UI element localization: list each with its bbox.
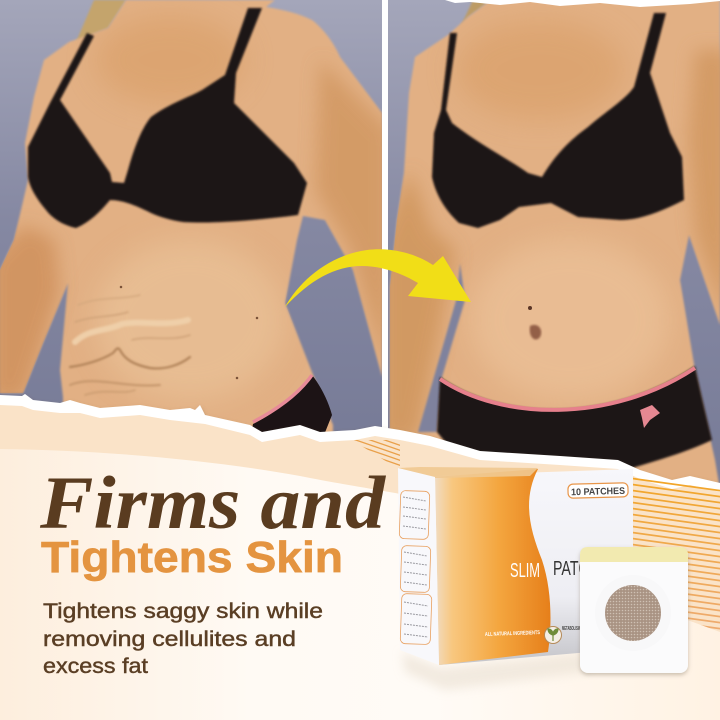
bra — [28, 8, 307, 228]
box reflection — [402, 652, 590, 690]
cream sweep — [0, 449, 720, 720]
adhesive tab — [580, 547, 688, 562]
belly tone — [95, 240, 285, 400]
orange stripes right — [633, 478, 720, 630]
box side face — [398, 468, 439, 665]
blonde hair — [462, 2, 486, 24]
briefs trim — [440, 368, 695, 410]
briefs trim — [253, 375, 312, 422]
description text — [43, 600, 323, 678]
yellow arrow — [285, 249, 471, 307]
box title slim: SLIM — [510, 560, 540, 582]
loose skin folds — [70, 295, 190, 395]
mole — [528, 306, 532, 310]
leaf seal — [544, 626, 562, 644]
product box — [398, 467, 633, 690]
peach layer — [0, 405, 720, 720]
blonde hair — [76, 0, 126, 42]
description text: Tightens saggy skin while — [43, 600, 323, 623]
left arm tone — [0, 225, 60, 400]
chest tone — [455, 20, 625, 120]
right arm tone — [688, 50, 720, 330]
brief logo — [640, 405, 660, 428]
side labels — [399, 490, 432, 645]
description text: excess fat — [43, 655, 148, 678]
subheadline: Tightens Skin — [41, 533, 343, 582]
briefs — [252, 375, 332, 432]
patch halo — [595, 575, 671, 651]
box white front — [435, 469, 633, 665]
patch base — [580, 547, 688, 673]
chest tone — [95, 15, 245, 105]
backdrop — [0, 0, 382, 440]
torso and arms — [0, 0, 382, 440]
top right torn edge — [445, 0, 720, 7]
torn paper shape — [0, 394, 720, 720]
box top edge — [398, 467, 538, 478]
product box: METABOLISM — [562, 626, 580, 632]
slim patch sample — [580, 547, 688, 673]
navel — [530, 325, 541, 340]
side tiny copy — [403, 497, 428, 637]
torso and arms — [390, 0, 720, 490]
lower torn paper panel — [0, 394, 720, 720]
backdrop — [388, 0, 720, 490]
briefs — [437, 366, 712, 472]
ingredient line: ALL NATURAL INGREDIENTS — [485, 630, 540, 638]
backdrop gap — [418, 263, 465, 432]
left arm tone — [390, 173, 460, 434]
description text: removing cellulites and — [43, 628, 296, 651]
orange stripes small — [354, 440, 400, 466]
box orange front — [435, 469, 550, 665]
bra — [432, 13, 684, 228]
moles — [121, 287, 257, 378]
right arm tone — [310, 64, 382, 361]
box title patch: PATCH — [553, 558, 599, 580]
patch count badge: 10 PATCHES — [571, 486, 625, 498]
before photo panel — [0, 0, 390, 440]
skin tones — [380, 20, 720, 440]
herbal pad — [605, 585, 661, 641]
headline: Firms and — [39, 462, 387, 545]
belly tone — [470, 240, 670, 400]
after photo panel — [380, 0, 720, 490]
skin tones — [0, 15, 390, 400]
